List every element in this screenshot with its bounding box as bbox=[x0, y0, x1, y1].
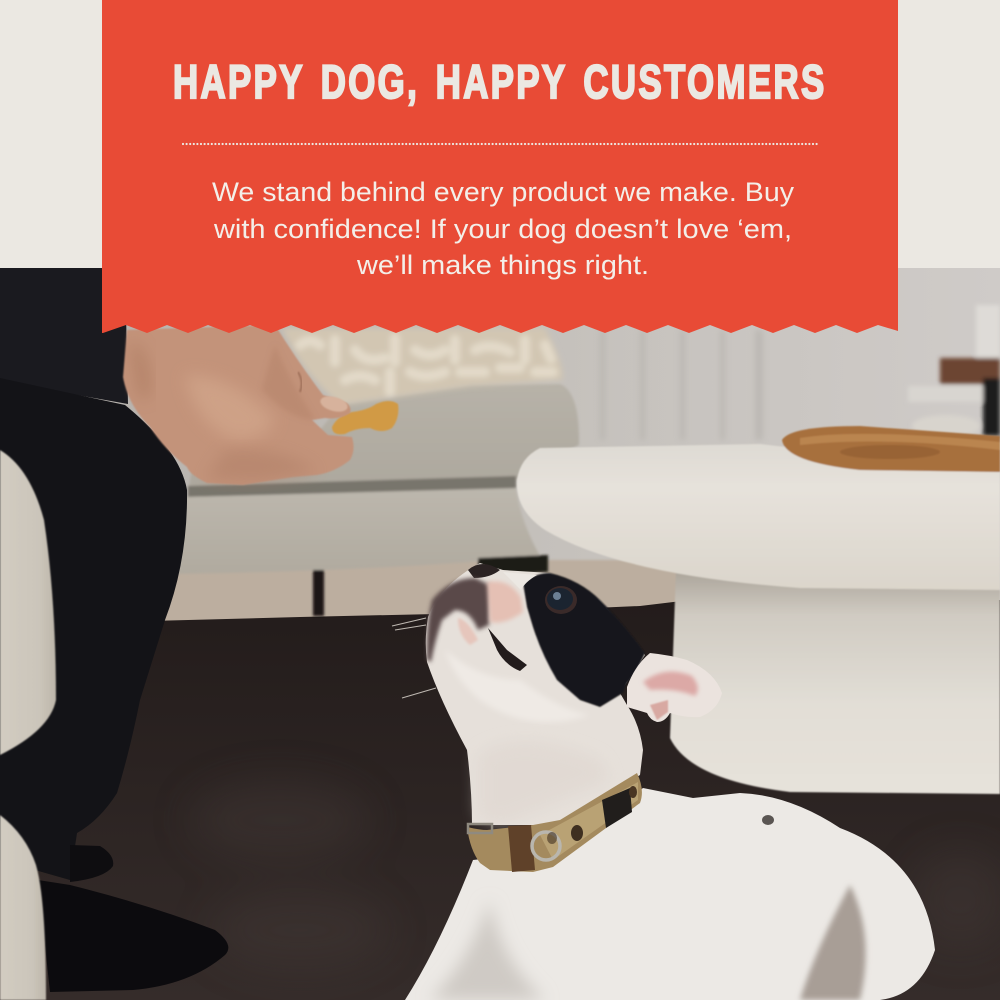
wall panel stripes bbox=[600, 330, 763, 440]
shelf and books bbox=[908, 305, 1000, 437]
whiskers bbox=[392, 618, 436, 698]
person: jumper and trousers bbox=[0, 268, 228, 992]
body text bbox=[212, 177, 795, 280]
white forehead stripe bbox=[503, 572, 537, 590]
wall bbox=[0, 268, 1000, 608]
ear bbox=[627, 653, 722, 722]
hand holding treat bbox=[123, 325, 398, 485]
dog neck and head bbox=[426, 563, 645, 825]
title: HAPPY DOG, HAPPY CUSTOMERS bbox=[173, 56, 824, 108]
black head patch bbox=[523, 573, 645, 707]
front sock bbox=[38, 880, 228, 992]
dotted divider bbox=[183, 143, 818, 145]
dog body bbox=[405, 788, 935, 1000]
knit pillow bbox=[282, 328, 562, 405]
treat: bone biscuit bbox=[332, 401, 398, 434]
red banner with zigzag bottom edge bbox=[102, 0, 898, 333]
body text: We stand behind every product we make. Buy bbox=[212, 177, 795, 207]
carpet bbox=[0, 600, 1000, 1000]
collar bbox=[467, 773, 642, 872]
left armchair bbox=[0, 450, 56, 1000]
body text: with confidence! If your dog doesn’t love ‘em, bbox=[213, 214, 792, 244]
background: cream band bbox=[0, 0, 1000, 268]
coffee table bbox=[517, 426, 1000, 794]
dog bbox=[392, 563, 935, 1000]
sofa bbox=[172, 384, 579, 616]
floor: wood bbox=[150, 560, 690, 626]
body text: we’ll make things right. bbox=[356, 250, 649, 280]
photo: living room with dog and treat bbox=[0, 268, 1000, 1000]
hand bbox=[123, 325, 354, 485]
thumbnail bbox=[319, 394, 349, 414]
carpet mottling bbox=[190, 780, 1000, 970]
nose and muzzle bbox=[468, 564, 500, 578]
thumb shading bbox=[262, 345, 315, 420]
back sock bbox=[70, 845, 113, 882]
eye bbox=[545, 586, 577, 614]
